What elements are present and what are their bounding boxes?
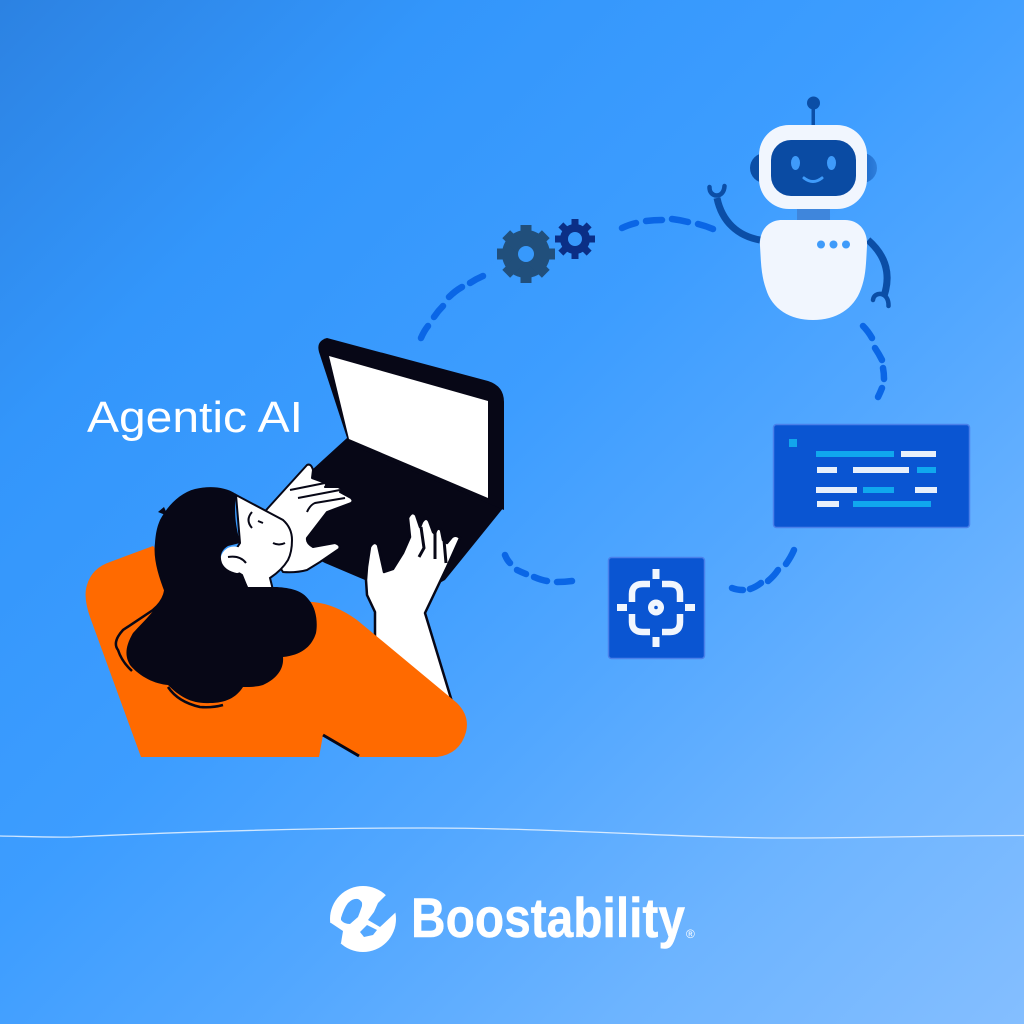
logo mark bbox=[330, 886, 396, 952]
facial details bbox=[228, 512, 285, 563]
left hand bbox=[262, 465, 352, 572]
dashed workflow loop bbox=[421, 219, 884, 590]
right arm and hand bbox=[366, 513, 460, 705]
laptop screen bbox=[329, 356, 488, 498]
robot eyes and smile bbox=[791, 156, 836, 182]
hair strand outline bbox=[116, 577, 223, 707]
robot chest dots bbox=[817, 240, 850, 248]
laptop base bbox=[290, 438, 504, 605]
wordmark: Boostability bbox=[411, 886, 685, 949]
target reticle bbox=[617, 569, 695, 647]
heading: Agentic AI: Agentic AI bbox=[87, 393, 303, 442]
icon: large gear bbox=[497, 225, 555, 283]
robot ears bbox=[750, 153, 877, 183]
right hand finger lines bbox=[419, 527, 446, 563]
left hand finger lines bbox=[290, 483, 345, 512]
code lines bbox=[789, 439, 937, 507]
hair bun tip bbox=[158, 507, 168, 516]
robot neck bbox=[797, 207, 830, 222]
orange shirt bbox=[86, 546, 467, 757]
robot face bbox=[771, 140, 856, 196]
registered mark: ® bbox=[686, 927, 695, 941]
hair bbox=[126, 487, 317, 703]
panel: target icon bbox=[608, 558, 704, 658]
robot head bbox=[759, 125, 867, 209]
robot antenna bbox=[807, 96, 820, 127]
illustration: person at laptop bbox=[86, 338, 504, 757]
neck and face bbox=[226, 495, 292, 590]
divider wave line bbox=[0, 828, 1024, 838]
robot arms bbox=[709, 186, 889, 306]
laptop lid bbox=[318, 338, 504, 510]
ear bbox=[220, 546, 248, 574]
icon: robot bbox=[709, 96, 889, 320]
icon: small gear bbox=[555, 219, 595, 259]
logo: Boostability bbox=[330, 886, 695, 952]
robot body bbox=[760, 220, 867, 320]
shirt fold line bbox=[323, 735, 359, 756]
panel: code window bbox=[774, 424, 970, 528]
